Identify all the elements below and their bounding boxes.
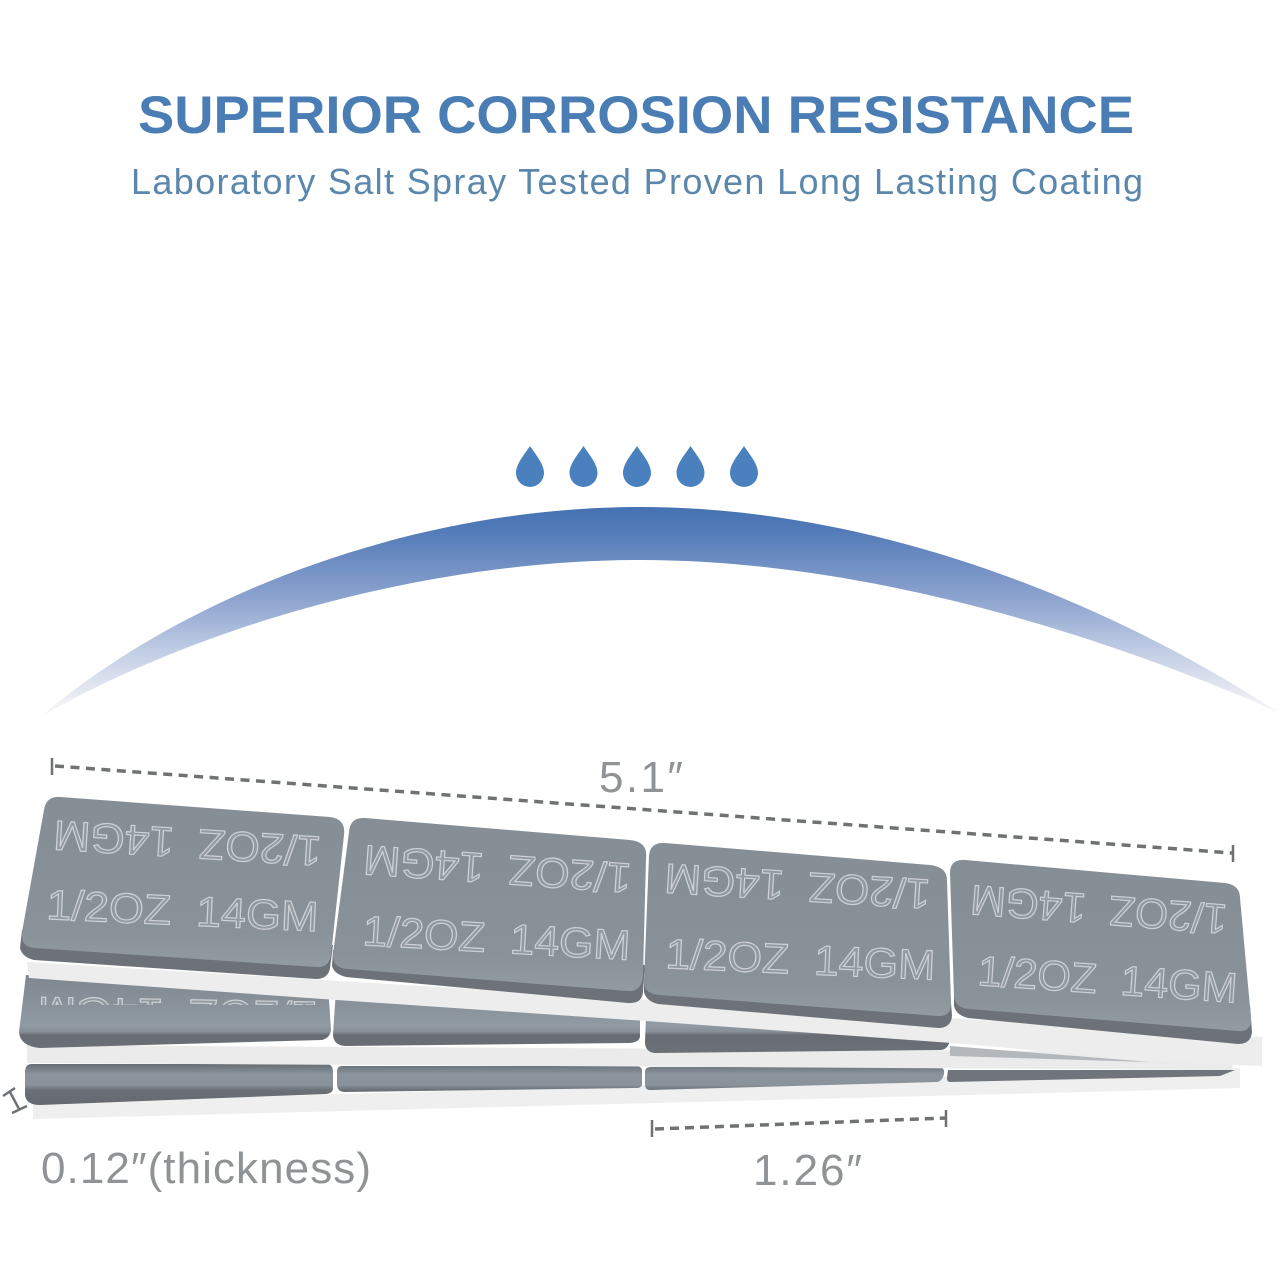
weight 3: [644, 843, 952, 1028]
dimension: 1.26 inch width: 1.26″: [753, 1146, 862, 1195]
weight 1: 1/2OZ 14GM: [46, 881, 319, 940]
bottom row of weights: [25, 1064, 944, 1105]
weight 4: 1/2OZ 14GM: [969, 876, 1229, 943]
weight 2: 1/2OZ 14GM: [361, 907, 632, 969]
dimension: 1.26 inch width: [652, 1110, 946, 1195]
weight 4: 1/2OZ 14GM: [976, 947, 1239, 1012]
middle backing paper: [27, 1045, 1236, 1070]
subtitle: Laboratory Salt Spray Tested Proven Long Lasting Coating: [131, 161, 1143, 202]
title: SUPERIOR CORROSION RESISTANCE: [138, 86, 1134, 145]
upper backing paper: [27, 962, 1262, 1066]
weight 3: 1/2OZ 14GM: [663, 855, 932, 918]
dimension: 5.1 inch length: 5.1″: [599, 753, 683, 802]
icon: water drops: [516, 446, 758, 487]
backing paper, bottom: [33, 1068, 1240, 1119]
weight 3: 1/2OZ 14GM: [665, 930, 936, 989]
dimension: 0.12 inch thickness: [3, 1088, 371, 1193]
weight 2: [332, 818, 646, 1003]
weight 2: 1/2OZ 14GM: [362, 836, 633, 902]
weight 4 under-piece: [950, 1046, 1150, 1062]
partly hidden middle row lettering: 1/2OZ 14GM: [37, 988, 318, 1040]
arch: protective coating: [40, 507, 1278, 717]
weight strip product photo: [19, 797, 1262, 1119]
far right tapered weight: [947, 1070, 1235, 1082]
dimension: 5.1 inch length: [52, 753, 1233, 862]
weight 4: [950, 860, 1252, 1044]
dimension: 0.12 inch thickness: 0.12″(thickness): [41, 1144, 371, 1193]
weight 1: [20, 797, 344, 979]
middle row of weights: [19, 975, 950, 1053]
weight 1: 1/2OZ 14GM: [52, 812, 323, 875]
